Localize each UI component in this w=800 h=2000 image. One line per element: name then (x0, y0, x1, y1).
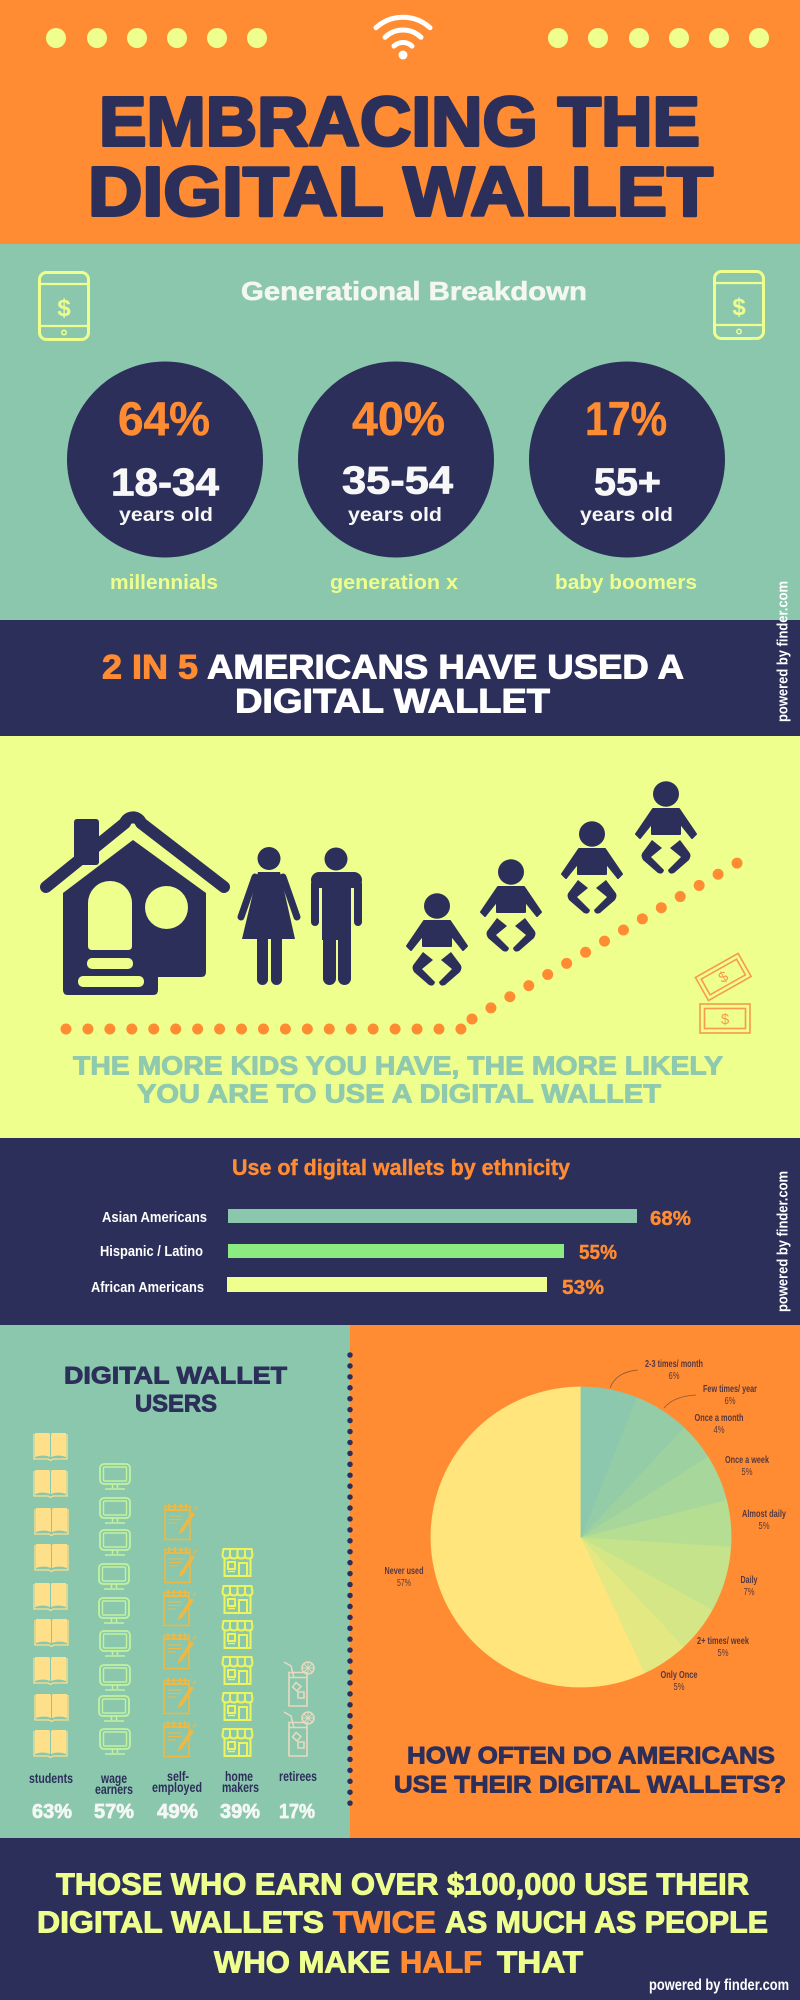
pie labels: 2-3 times/ month (645, 1359, 703, 1370)
pie labels: 57% (397, 1578, 411, 1589)
labels: occupation percentages: 17% (279, 1801, 315, 1823)
heading: digital wallet users: DIGITAL WALLET (64, 1362, 287, 1390)
labels: occupation percentages: 39% (220, 1801, 260, 1823)
pictogram: wage earners monitors (99, 1464, 130, 1754)
icon: phone with dollar, right: $ (732, 294, 746, 321)
circle: generation x: 40% (352, 392, 445, 445)
circle: generation x: years old (348, 504, 442, 526)
circle: millennials: years old (119, 504, 213, 526)
pictogram: self-employed notepads (164, 1504, 197, 1756)
heading: how often do americans: HOW OFTEN DO AMERICANS (407, 1742, 775, 1770)
labels: occupation names: makers (222, 1780, 259, 1795)
heading: use by ethnicity: Use of digital wallets by ethnicity (232, 1155, 571, 1180)
headline: 2 in 5 americans: AMERICANS HAVE USED A (207, 648, 684, 686)
pictogram: home makers stores (222, 1549, 252, 1756)
statement: income: AS MUCH AS PEOPLE (445, 1904, 768, 1940)
statement: income: HALF (400, 1944, 482, 1980)
pie labels: 7% (744, 1587, 755, 1598)
circle: millennials (67, 362, 263, 558)
statement: income: THAT (497, 1944, 583, 1980)
labels: generation names (110, 571, 697, 594)
bar: hispanic latino (100, 1242, 617, 1264)
panel: income banner (0, 1838, 800, 2000)
headline: 2 in 5 americans: 2 IN 5 (102, 648, 198, 686)
pie chart: usage frequency (431, 1387, 731, 1687)
icon: baby one (407, 893, 467, 986)
labels: occupation names: self- (167, 1769, 189, 1784)
panel: kids and family (0, 736, 800, 1138)
bar: hispanic latino: Hispanic / Latino (100, 1243, 203, 1260)
pie labels: 6% (668, 1371, 680, 1382)
icon: baby four (636, 781, 696, 874)
title: DIGITAL WALLET (88, 152, 713, 230)
pie labels: Only Once (660, 1670, 698, 1681)
title: EMBRACING THE (99, 82, 700, 160)
pictogram: retirees drinks (284, 1662, 314, 1756)
caption: more kids more likely: YOU ARE TO USE A DIGITAL WALLET (137, 1078, 661, 1108)
pie labels: 5% (742, 1467, 753, 1478)
labels: occupation names: wage (100, 1771, 127, 1786)
icon: phone with dollar, left (40, 272, 88, 340)
headline: 2 in 5 americans (102, 648, 684, 720)
circle: millennials: 18-34 (111, 462, 220, 504)
bar: african americans: African Americans (91, 1279, 204, 1296)
headline: 2 in 5 americans: DIGITAL WALLET (235, 682, 550, 720)
statement: income: WHO MAKE (214, 1944, 390, 1980)
pie labels: 6% (724, 1396, 736, 1407)
labels: occupation percentages: 57% (94, 1801, 134, 1823)
icon: baby two (481, 859, 541, 952)
icon: woman (241, 847, 297, 985)
heading: digital wallet users (64, 1362, 287, 1418)
bar: asian americans (102, 1208, 691, 1230)
decorative dots: right row (548, 28, 769, 48)
decorative dots: left row (46, 28, 267, 48)
bar: asian americans: Asian Americans (102, 1209, 207, 1226)
pie leader lines (610, 1370, 696, 1408)
bar: asian americans: 68% (650, 1208, 691, 1230)
pie labels: Almost daily (742, 1509, 786, 1520)
labels: occupation names: home (225, 1769, 253, 1784)
bar: african americans: 53% (562, 1277, 604, 1299)
panel: ethnicity bar chart (0, 1138, 800, 1325)
pie labels: Never used (384, 1566, 424, 1577)
labels: generation names: generation x (330, 571, 459, 594)
bar: african americans (91, 1277, 604, 1299)
dotted trend line (66, 863, 737, 1029)
circle: baby boomers (529, 362, 725, 558)
icon: house (46, 817, 224, 995)
caption: more kids more likely: THE MORE KIDS YOU HAVE, THE MORE LIKELY (73, 1050, 723, 1080)
icon: phone with dollar, right (714, 272, 764, 338)
circle: baby boomers: 55+ (594, 461, 661, 504)
credit: vertical powered by finder.com: powered by finder.com (774, 1171, 792, 1312)
dotted divider (347, 1355, 353, 1804)
heading: digital wallet users: USERS (135, 1390, 217, 1418)
caption: more kids more likely (73, 1050, 723, 1108)
panel: header (0, 0, 800, 244)
labels: generation names: millennials (110, 571, 218, 594)
pie labels (384, 1359, 786, 1693)
circle: baby boomers: 17% (585, 392, 667, 445)
icon: man (311, 848, 362, 985)
icon: falling money: $ (721, 1011, 730, 1028)
statement: income: DIGITAL WALLETS (37, 1904, 324, 1940)
labels: occupation names: retirees (279, 1769, 317, 1784)
title (88, 82, 713, 230)
labels: occupation percentages (32, 1801, 315, 1823)
circle: baby boomers: years old (580, 504, 673, 526)
pie labels: 5% (674, 1682, 685, 1693)
labels: occupation names: earners (95, 1782, 133, 1797)
circle: generation x (298, 362, 494, 558)
bar: hispanic latino: 55% (579, 1242, 617, 1264)
icon: phone with dollar, left: $ (57, 295, 71, 322)
icon: falling money: $ (716, 968, 732, 987)
panel: digital wallet users (0, 1325, 350, 1838)
labels: occupation names (29, 1769, 317, 1797)
panel: 2 in 5 banner (0, 620, 800, 736)
heading: how often do americans (394, 1742, 786, 1798)
pie labels: 2+ times/ week (697, 1636, 749, 1647)
pie labels: Once a month (694, 1413, 744, 1424)
labels: generation names: baby boomers (555, 571, 697, 594)
statement: income: THOSE WHO EARN OVER $100,000 USE THEIR (56, 1866, 749, 1902)
panel: generational breakdown (0, 244, 800, 620)
pie labels: Few times/ year (703, 1384, 757, 1395)
labels: occupation names: students (29, 1771, 73, 1786)
pie labels: Once a week (725, 1455, 769, 1466)
statement: income: TWICE (333, 1904, 436, 1940)
heading: generational breakdown: Generational Breakdown (241, 276, 587, 306)
heading: how often do americans: USE THEIR DIGITAL WALLETS? (394, 1772, 786, 1798)
pie labels: 5% (758, 1521, 770, 1532)
icon: baby three (562, 821, 622, 914)
pie labels: 4% (714, 1425, 725, 1436)
labels: occupation percentages: 63% (32, 1801, 72, 1823)
pie labels: Daily (740, 1575, 758, 1586)
circle: generation x: 35-54 (342, 460, 454, 502)
icon: falling money (695, 953, 751, 1033)
panel: how often (350, 1325, 800, 1838)
labels: occupation percentages: 49% (157, 1801, 198, 1823)
icon: wifi (376, 17, 430, 59)
credit: vertical powered by finder.com: powered by finder.com (774, 581, 792, 722)
labels: occupation names: employed (152, 1780, 202, 1795)
pie labels: 5% (718, 1648, 729, 1659)
circle: millennials: 64% (118, 392, 210, 445)
statement: income (37, 1866, 768, 1980)
pictogram: students books (34, 1433, 68, 1758)
